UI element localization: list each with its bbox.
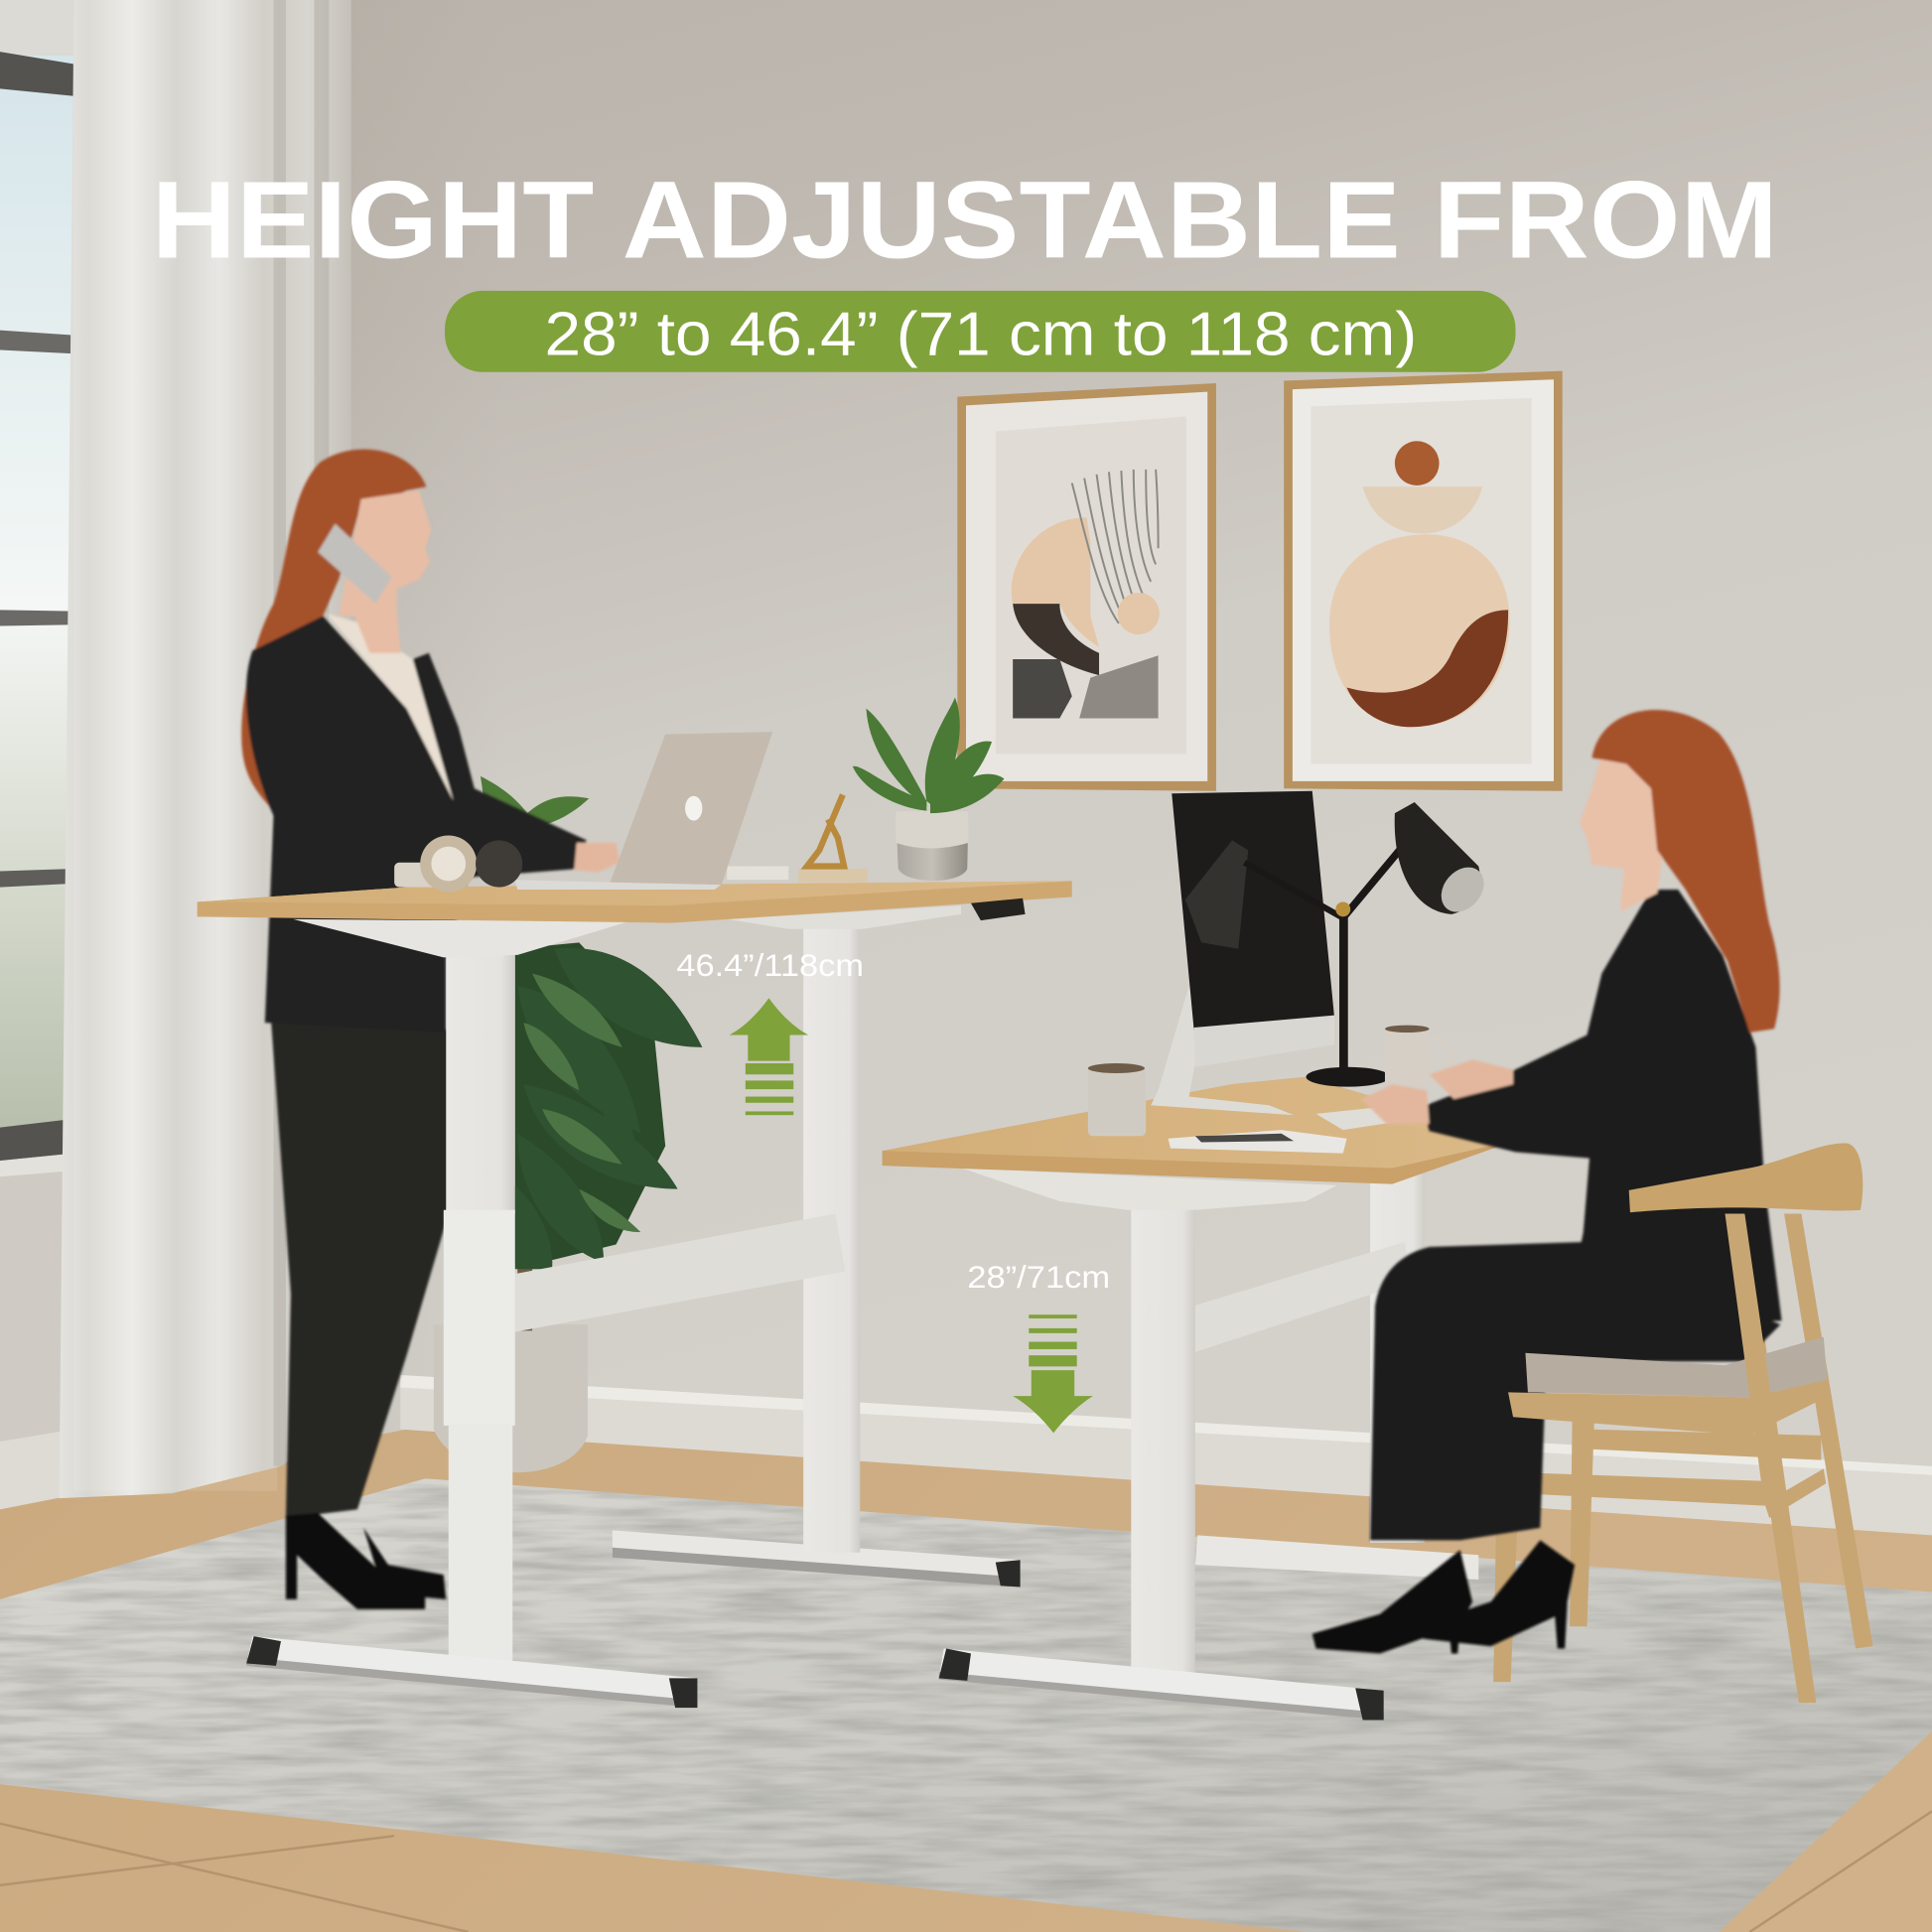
chair seat	[1525, 1337, 1828, 1397]
seated desk top	[883, 1077, 1518, 1184]
laptop logo	[685, 796, 702, 821]
arrow up	[730, 998, 808, 1115]
height range text: 28” to 46.4” (71 cm to 118 cm)	[545, 300, 1417, 368]
seated desk	[883, 1077, 1518, 1721]
monitor	[1172, 791, 1334, 1067]
curtains	[60, 0, 351, 1498]
books	[727, 866, 788, 880]
notebook and phone	[1169, 1130, 1346, 1154]
art shapes left	[1012, 470, 1160, 719]
hair	[241, 449, 426, 811]
standing desk back leg	[803, 921, 860, 1553]
chair rear legs	[1725, 1213, 1816, 1703]
phone	[318, 523, 392, 604]
pants	[271, 1021, 449, 1518]
seated woman	[1312, 710, 1782, 1654]
framed art left	[957, 383, 1216, 791]
shirt	[327, 614, 454, 801]
desk lamp	[1244, 802, 1492, 1087]
arrow down	[1013, 1314, 1093, 1433]
low label: 28”/71cm	[967, 1260, 1110, 1295]
chair backrest	[1629, 1144, 1863, 1212]
standing desk back foot	[613, 1530, 1021, 1587]
jacket	[1423, 890, 1782, 1324]
mug front	[1088, 1063, 1146, 1136]
standing desk front leg	[444, 955, 515, 1663]
art shapes right	[1329, 441, 1510, 727]
lamp reflection	[1185, 840, 1248, 949]
chair	[1493, 1213, 1872, 1703]
gold figurine	[798, 794, 868, 883]
chair seat and backrest	[1508, 1144, 1863, 1506]
monitor stand	[1151, 986, 1294, 1115]
standing desk underframe	[293, 919, 628, 957]
phone hand	[349, 579, 400, 653]
standing woman	[241, 449, 620, 1609]
rug	[0, 1478, 1932, 1932]
pants	[1370, 1242, 1780, 1540]
height range pill	[445, 291, 1516, 372]
seated desk front leg	[1131, 1207, 1195, 1673]
seated desk underframe	[961, 1169, 1337, 1210]
large floor plant	[434, 776, 702, 1472]
title: HEIGHT ADJUSTABLE FROM	[152, 159, 1778, 281]
seated desk cross bar	[1192, 1242, 1411, 1353]
mug back	[1385, 1026, 1452, 1087]
keyboard hand	[574, 843, 620, 873]
upper hand	[1430, 1059, 1513, 1099]
chair arm post	[1725, 1213, 1787, 1506]
laptop	[515, 732, 772, 890]
standing desk items	[394, 697, 1004, 893]
seated desk back leg	[1370, 1173, 1425, 1543]
potted desk plant	[853, 697, 1004, 881]
standing desk front foot	[246, 1636, 697, 1708]
heels	[1312, 1540, 1575, 1654]
standing desk	[198, 881, 1072, 1708]
headphones	[394, 835, 522, 893]
face	[1580, 755, 1663, 911]
standing desk top	[198, 881, 1072, 923]
heels	[286, 1513, 446, 1609]
chair front legs	[1493, 1395, 1523, 1682]
desk control panel	[971, 898, 1026, 920]
lower hand	[1361, 1084, 1430, 1124]
standing desk cross bar	[507, 1213, 845, 1333]
face	[339, 490, 431, 617]
hair	[1591, 710, 1780, 1033]
seated desk items	[1088, 791, 1492, 1154]
framed art right	[1284, 371, 1563, 791]
keyboard	[1315, 1106, 1417, 1130]
seated desk front foot	[939, 1649, 1384, 1721]
high label: 46.4”/118cm	[676, 948, 864, 983]
chair rails	[1518, 1472, 1764, 1506]
blazer	[246, 617, 587, 1033]
seated desk back foot	[1195, 1535, 1478, 1580]
